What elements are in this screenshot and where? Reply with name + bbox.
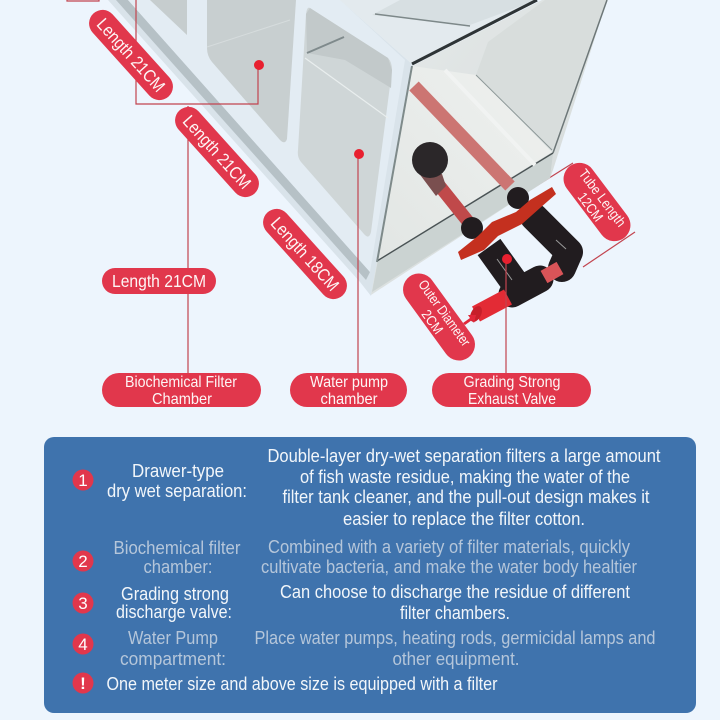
label: grading strong exhaust valve: Grading Strong: [464, 374, 560, 391]
label: biochemical filter chamber: Chamber: [152, 391, 213, 408]
feature 4: Place water pumps, heating rods, germicidal lamps and: [254, 627, 656, 648]
feature 3: 3: [78, 594, 88, 613]
label: water pump chamber: [290, 373, 407, 408]
tank front face: [108, 0, 412, 296]
feature 1: easier to replace the filter cotton.: [343, 508, 585, 529]
feature 4: [72, 627, 656, 669]
diagonal label: length 18CM: Length 18CM: [267, 213, 343, 295]
feature 4: 4: [78, 635, 88, 654]
feature 4: compartment:: [120, 648, 226, 669]
horizontal label: length 21CM: [102, 268, 216, 294]
leader lines behind tank: [67, 0, 635, 373]
feature 1: dry wet separation:: [107, 480, 247, 501]
label: grading strong exhaust valve: Exhaust Valve: [468, 391, 556, 408]
feature 3: Grading strong: [121, 583, 229, 604]
red handle bar: [458, 187, 556, 260]
black pipes: [461, 187, 569, 294]
feature 3: discharge valve:: [116, 601, 232, 622]
internal red tube: [414, 86, 510, 186]
feature 3: [72, 581, 630, 623]
note: !: [80, 674, 86, 693]
label: outer diameter 2CM: [397, 267, 481, 367]
feature 4: other equipment.: [392, 648, 520, 669]
tank window 3: [298, 8, 392, 237]
label: outer diameter 2CM: Outer Diameter: [415, 277, 474, 349]
tank side face: [371, 0, 607, 295]
feature 4: Water Pump: [128, 627, 218, 648]
note: One meter size and above size is equipped with a filter: [106, 673, 498, 694]
feature 3: filter chambers.: [400, 602, 510, 623]
label: biochemical filter chamber: Biochemical Filter: [125, 374, 238, 391]
small arrow: [463, 315, 476, 325]
label: tube length 12CM: Tube Length: [576, 166, 629, 230]
feature 1: [72, 445, 660, 529]
feature 1: 1: [78, 471, 88, 490]
label: outer diameter 2CM: 2CM: [418, 306, 447, 337]
label: tube length 12CM: 12CM: [575, 189, 607, 224]
callout lines over tank: [136, 0, 506, 373]
label: water pump chamber: chamber: [320, 391, 378, 408]
feature 2: cultivate bacteria, and make the water body healtier: [261, 556, 637, 577]
feature 2: Biochemical filter: [114, 537, 240, 558]
feature 1: Double-layer dry-wet separation filters a large amount: [268, 445, 660, 466]
feature 3: Can choose to discharge the residue of different: [280, 581, 630, 602]
short red tube: [438, 184, 470, 224]
panel: features: [44, 437, 696, 713]
feature 2: 2: [78, 552, 88, 571]
feature 1: filter tank cleaner, and the pull-out design makes it: [282, 486, 650, 507]
label: grading strong exhaust valve: [432, 373, 591, 408]
horizontal label: length 21CM: Length 21CM: [112, 271, 206, 291]
label: water pump chamber: Water pump: [310, 374, 388, 391]
feature 2: Combined with a variety of filter materials, quickly: [268, 536, 631, 557]
valve highlights: [497, 259, 512, 280]
filter tank illustration: [108, 0, 607, 325]
tank top with drawer: [340, 0, 537, 64]
exhaust valve: [458, 187, 569, 324]
feature 2: chamber:: [144, 556, 212, 577]
feature 2: [72, 536, 637, 577]
label: biochemical filter chamber: [102, 373, 261, 408]
red connector and outlet: [544, 268, 560, 277]
diagonal label: length 21CM middle: Length 21CM: [179, 111, 255, 193]
feature 1: of fish waste residue, making the water of the: [300, 466, 630, 487]
tank window 1: [150, 0, 187, 35]
label: tube length 12CM: [557, 156, 637, 248]
diagonal label: length 21CM upper: Length 21CM: [93, 14, 169, 96]
feature 1: Drawer-type: [132, 460, 224, 481]
tank window 2: [207, 0, 296, 142]
black knob: [412, 142, 448, 196]
marker dots: [254, 60, 512, 264]
